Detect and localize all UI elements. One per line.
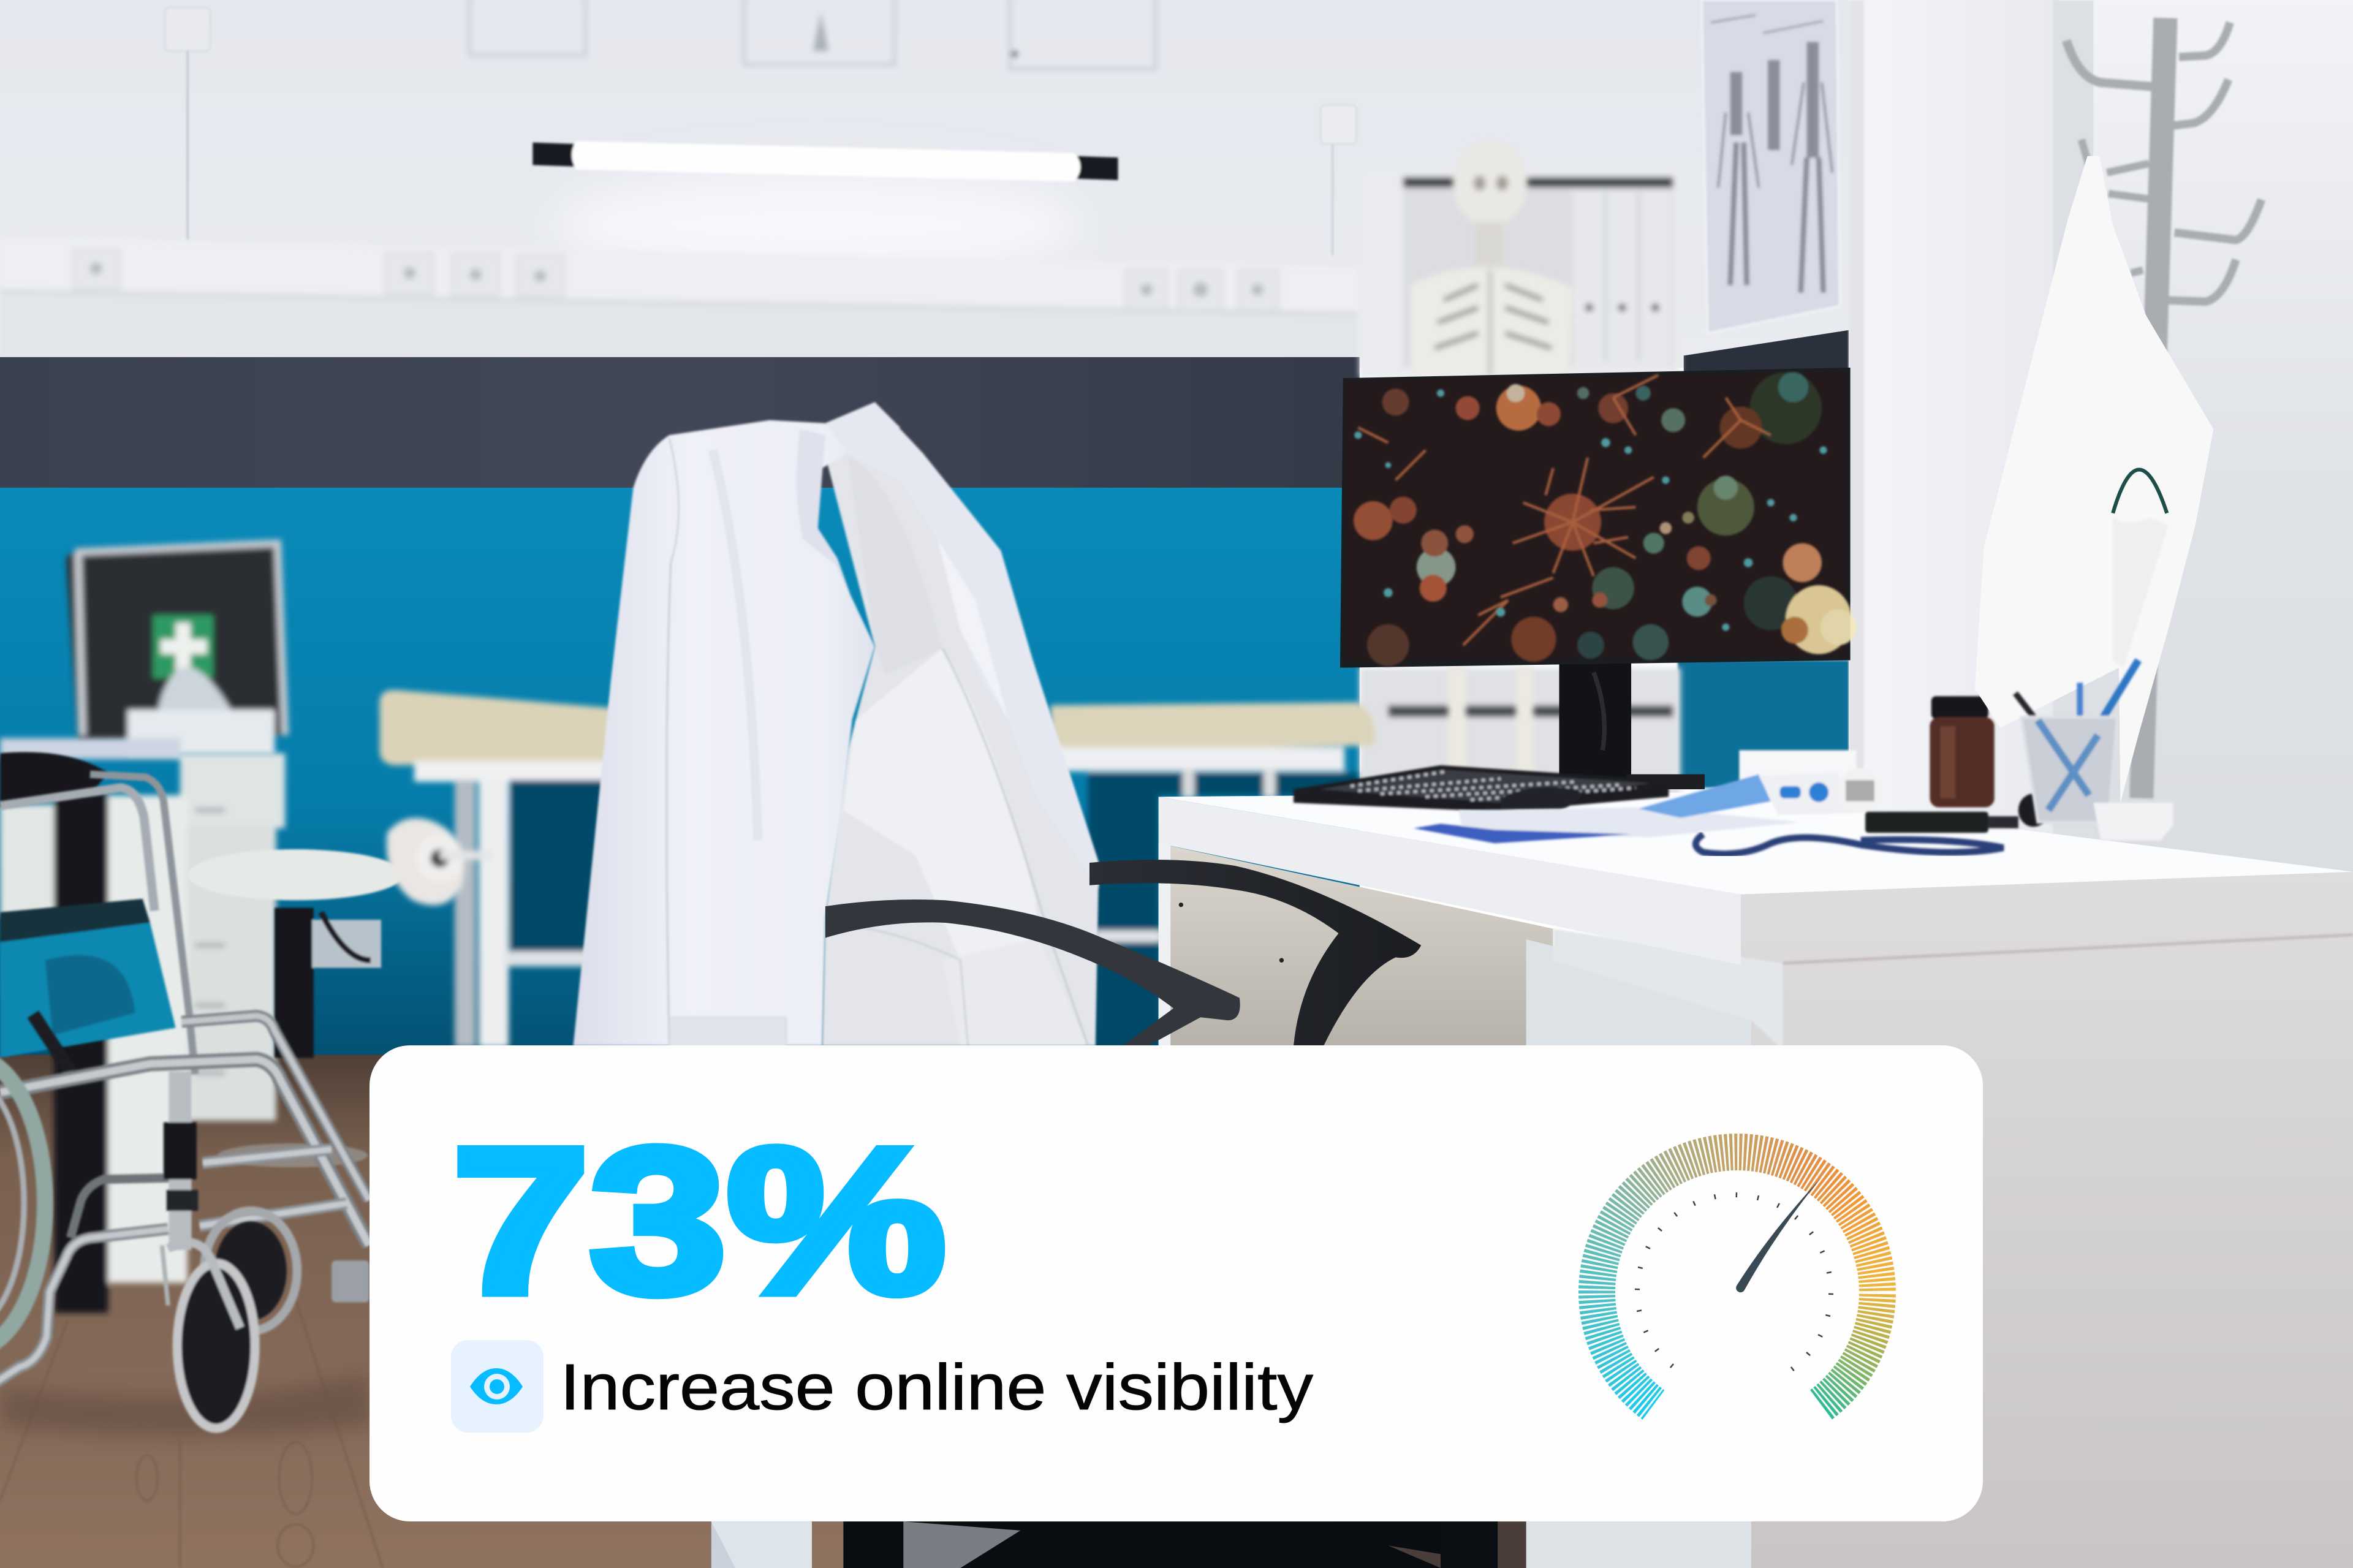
- medicine bottle: [1930, 696, 1995, 807]
- fluorescent wall light: [532, 141, 1118, 181]
- monitor screen: central cell: [1358, 375, 1771, 645]
- bottom chair base: [711, 1521, 1756, 1568]
- wheelchair: chrome frame and wheels: [0, 775, 369, 1384]
- poster on wall: [1702, 0, 1840, 333]
- wall sensors and cable: [165, 7, 1357, 255]
- chair armrests: [825, 860, 1421, 1046]
- gauge dial: [1578, 1134, 1896, 1451]
- otoscope: [1865, 793, 2048, 833]
- icon: eye badge: [451, 1340, 544, 1433]
- hanging white lab coat: [1975, 156, 2213, 803]
- wall trunking with sockets: [0, 237, 1358, 357]
- blue wall: [0, 488, 1360, 1066]
- monitor screen: teal specks: [1354, 389, 1827, 631]
- coat rack: [2066, 18, 2262, 798]
- gauge ticks: [1635, 1192, 1833, 1371]
- big number 73%: 73%: [452, 1105, 946, 1336]
- white drawer cabinet: [0, 738, 285, 1313]
- floor: [0, 1055, 843, 1568]
- paper roll: [387, 818, 492, 905]
- monitor: [1340, 368, 1856, 789]
- white lab coat on chair: [574, 402, 1099, 1047]
- wall certificates: [470, 0, 1156, 69]
- wall light glow: [555, 171, 1080, 279]
- desk papers, wristband and thermometer: [1414, 750, 1882, 843]
- wheelchair: casters and footplate: [162, 1211, 369, 1428]
- dark wall band: [0, 357, 1360, 489]
- label text: Increase online visibility: [560, 1351, 1313, 1423]
- desk body: [1159, 843, 2353, 1568]
- rear armrest: [1089, 860, 1421, 1046]
- chair back: [822, 444, 1099, 1046]
- right wall column: [1849, 0, 2059, 855]
- shelving cabinet with binders: [1360, 168, 1681, 803]
- medical case with cross: [66, 542, 285, 755]
- stethoscope: [1696, 835, 2003, 854]
- gauge needle: [1736, 1177, 1822, 1292]
- gauge stripes and centre mask: [1597, 1152, 1877, 1433]
- examination table: [380, 690, 1375, 1050]
- front armrest: [825, 900, 1240, 1046]
- keyboard: [1294, 765, 1669, 812]
- wheelchair: blue sling: [0, 752, 176, 1058]
- stool: [188, 849, 404, 1167]
- monitor screen: [1344, 372, 1846, 660]
- pen cup: [2015, 660, 2173, 840]
- skeleton: [1411, 140, 1573, 773]
- back wall: [0, 0, 1861, 368]
- desk top: [1159, 792, 2353, 965]
